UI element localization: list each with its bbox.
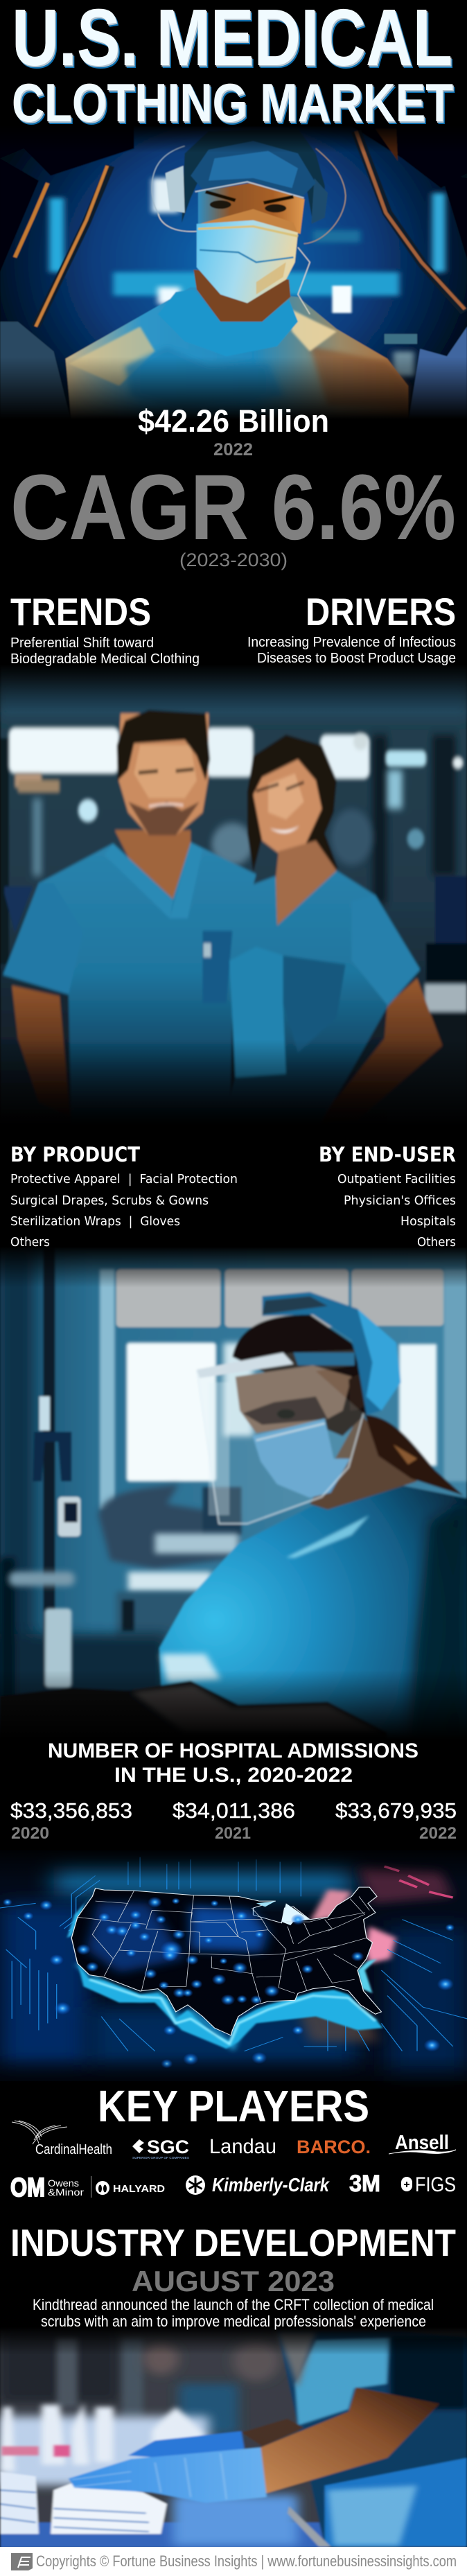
stat: 2020 admissions [10,1798,132,1843]
market size stat [138,403,329,459]
panel: by product [10,1143,238,1250]
panel: by end-user: Physician's Offices [344,1193,456,1208]
panel: hospital admissions heading: NUMBER OF HOSPITAL ADMISSIONS [48,1740,418,1762]
panel: trends [10,590,200,667]
panel: by product: Others [10,1235,50,1250]
logo: SGC: SGC [147,2137,189,2157]
logo: 3M: 3M [349,2171,380,2197]
stat: 2021 admissions: 2021 [215,1824,251,1843]
market size stat: 2022 [213,440,253,459]
footer: copyright bar [0,2547,467,2576]
logo: Kimberly-Clark: Kimberly-Clark [212,2174,330,2196]
photo: nurse with face shield [0,1246,467,1747]
panel: drivers [247,590,456,666]
photo: gloved hands on folded scrubs [0,2327,467,2548]
logo: Owens & Minor: &Minor [48,2187,84,2198]
stat: 2020 admissions: $33,356,853 [10,1798,132,1823]
panel: drivers: Diseases to Boost Product Usage [257,651,456,666]
logo: Halyard: HALYARD [113,2183,165,2195]
stat: 2021 admissions [173,1798,295,1843]
panel: by end-user: Hospitals [400,1214,456,1229]
sub-element: nurse figure [159,1292,467,1742]
logo: FIGS: FIGS [415,2173,456,2196]
panel: trends: TRENDS [10,590,151,633]
icon: Fortune Business Insights logo [11,2553,33,2570]
stat: 2022 admissions: 2022 [419,1824,457,1843]
CAGR stat: (2023-2030) [179,550,288,570]
panel: by product: Protective Apparel | Facial Protection [10,1172,238,1186]
stat: 2021 admissions: $34,011,386 [173,1798,295,1823]
logo: Cardinal Health: CardinalHealth [35,2142,112,2157]
stat: 2022 admissions: $33,679,935 [335,1798,457,1823]
sub-element: state borders [78,1891,369,2003]
panel: drivers: Increasing Prevalence of Infectious [247,635,456,650]
panel: by product: Sterilization Wraps | Gloves [10,1214,180,1229]
map: glowing U.S. over circuit board [0,1853,467,2083]
logo: Owens & Minor: OM [10,2173,45,2202]
description: Kindthread announcement: scrubs with an aim to improve medical professionals' experience [41,2313,426,2330]
panel: trends: Biodegradable Medical Clothing [10,651,200,667]
logo: Owens & Minor: Owens [48,2178,79,2189]
logo: Halyard [96,2181,165,2195]
stat: 2022 admissions [335,1798,457,1843]
logo: FIGS [401,2173,456,2196]
panel: hospital admissions heading [48,1740,418,1787]
logo: BARCO: BARCO. [297,2137,371,2157]
photo: medical staff in scrubs [0,664,467,1134]
panel: by product: Surgical Drapes, Scrubs & Gowns [10,1193,209,1208]
panel: by product: BY PRODUCT [10,1143,140,1166]
title [12,0,453,133]
logo: Owens & Minor [10,2173,84,2202]
sub-element: city lights [3,1897,455,2068]
logo: SGC [132,2137,189,2159]
sub-element: woman [220,735,443,1130]
panel: by end-user: BY END-USER [319,1143,456,1166]
panel: hospital admissions heading: IN THE U.S., 2020-2022 [114,1764,353,1787]
logo: Ansell: Ansell [395,2132,449,2154]
sub-element: man [3,710,256,1130]
logo: SGC: SUPERIOR GROUP OF COMPANIES [132,2156,189,2159]
logo: Landau: Landau [209,2135,276,2158]
description: Kindthread announcement [33,2296,434,2330]
market size stat: $42.26 Billion [138,403,329,439]
date: August 2023: AUGUST 2023 [132,2265,335,2297]
panel: by end-user: Others [417,1235,456,1250]
panel: by end-user: Outpatient Facilities [337,1172,456,1186]
panel: trends: Preferential Shift toward [10,636,154,651]
stat: 2020 admissions: 2020 [11,1824,49,1843]
panel: by end-user [319,1143,456,1250]
hero illustration: surgeon with mask [0,125,467,423]
heading: key players: KEY PLAYERS [98,2081,369,2131]
logo: Cardinal Health [12,2121,112,2157]
